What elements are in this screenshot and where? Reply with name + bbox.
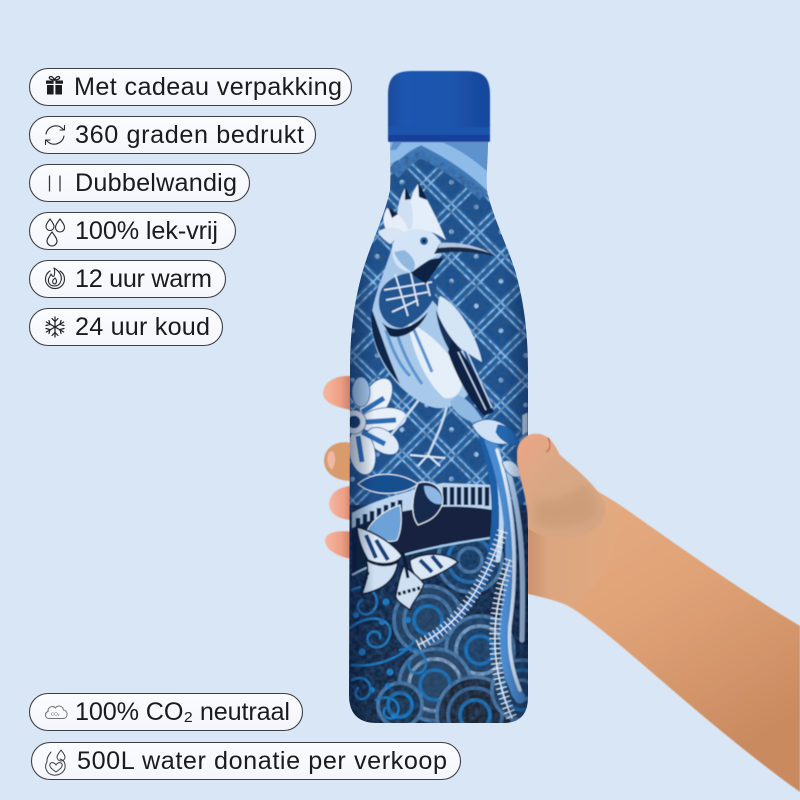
bird rump feathers: [450, 395, 484, 423]
wave circles: [376, 540, 528, 723]
icon: gift: [46, 76, 63, 94]
badge: double walled: [30, 164, 250, 202]
bird: [371, 182, 497, 466]
bird throat: [410, 258, 444, 284]
icon: cloud CO2: [45, 706, 67, 718]
badge: CO2 neutral: [30, 694, 302, 730]
bottle upper colour: [390, 142, 488, 196]
blue swirls: [350, 587, 426, 718]
badge: gift wrapping: Met cadeau verpakking: [74, 73, 342, 101]
bridge: [352, 483, 493, 575]
lattice pattern: [350, 158, 528, 506]
bird wing: [438, 296, 482, 362]
badge: 24 hours cold: [30, 308, 222, 346]
fingers: [323, 376, 354, 559]
icon: snowflake: [46, 317, 64, 337]
badge: double walled: Dubbelwandig: [75, 169, 237, 197]
mottled top fragment: [443, 142, 488, 172]
badge: leak free: [30, 212, 236, 250]
bridge railing: [352, 483, 493, 528]
bird beak: [434, 243, 497, 257]
dark band under bridge: [352, 504, 493, 575]
fern feather one: [418, 530, 503, 645]
swirl dots: [353, 567, 411, 719]
bird body: [371, 234, 472, 408]
badge: 12 hours warm: [30, 260, 226, 298]
arch mottled edge: [394, 152, 484, 196]
bird head: [392, 228, 445, 272]
bird crest: [378, 182, 446, 244]
fern feather two: [495, 560, 512, 718]
print mottling: [345, 145, 535, 730]
bottle: [349, 70, 528, 723]
icon: rotating arrows: [46, 126, 64, 144]
badge: water donation: 500L water donatie per verkoop: [77, 747, 447, 775]
badge: leak free: 100% lek-vrij: [75, 217, 218, 245]
badge: 360 degree print: 360 graden bedrukt: [75, 121, 304, 149]
icon: flame in circle: [45, 268, 64, 289]
icon: double wall bars: [50, 176, 60, 192]
bottle side shading: [349, 253, 528, 722]
badge: 24 hours cold: 24 uur koud: [75, 313, 210, 341]
upper right leaves: [472, 412, 528, 477]
icon: water drops: [46, 219, 64, 246]
bird legs: [390, 398, 448, 455]
bottle artwork: [349, 142, 528, 723]
bottle cap: [388, 71, 490, 142]
icon: cloud CO2: CO₂: [51, 712, 60, 716]
badge: 12 hours warm: 12 uur warm: [75, 265, 212, 293]
lower scrollwork panel: [349, 504, 528, 723]
badge: water donation: [32, 742, 460, 780]
badge: CO2 neutral: 100% CO₂ neutraal: [75, 698, 290, 726]
bird scaled chest: [379, 273, 437, 328]
arm and palm: [510, 480, 800, 792]
butterfly: [357, 527, 458, 610]
badge: gift wrapping: [30, 68, 352, 106]
leaves on bridge: [358, 474, 443, 541]
bird foot: [410, 455, 445, 466]
badge: 360 degree print: [30, 116, 316, 154]
icon: water drops with heart: [46, 750, 65, 775]
thumb: [517, 434, 605, 538]
flower: [350, 376, 408, 476]
tail feathers: [418, 425, 523, 718]
